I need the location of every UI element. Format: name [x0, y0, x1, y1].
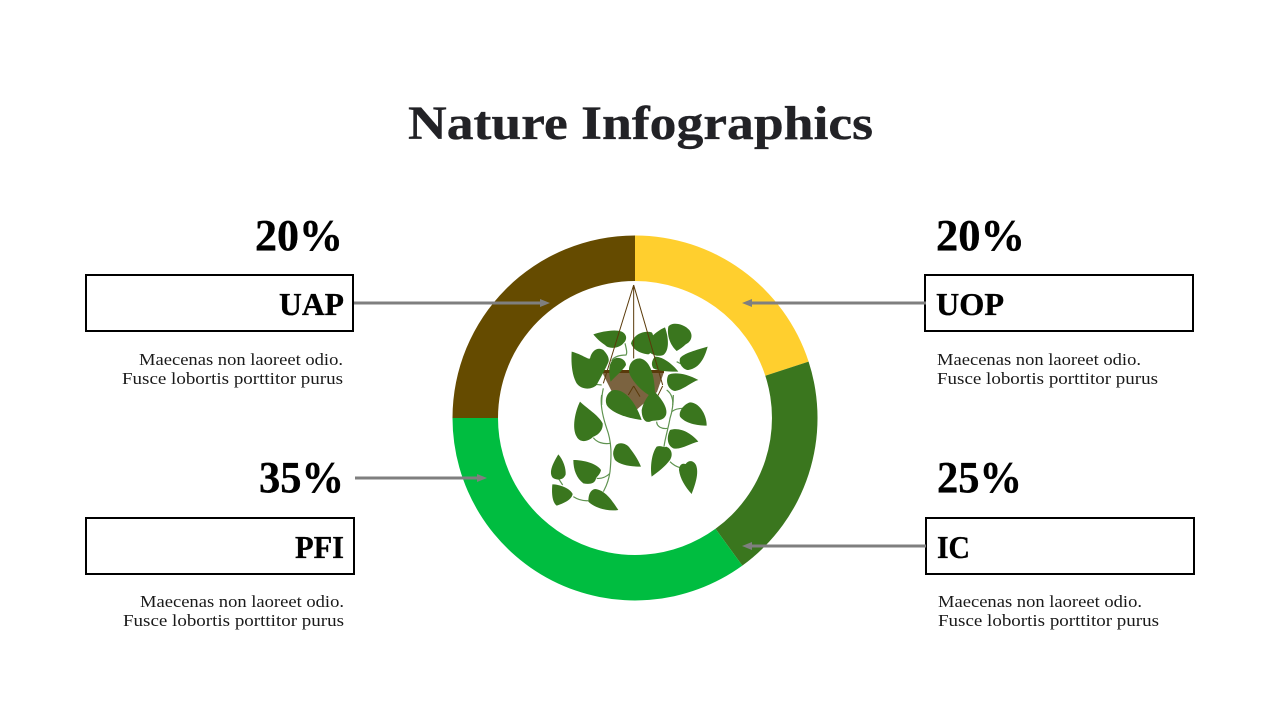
- IC description: Maecenas non laoreet odio.: [938, 592, 1142, 611]
- UOP percentage: 20%: [936, 211, 1025, 260]
- panel: UOP: [925, 211, 1193, 388]
- IC label box: [926, 518, 1194, 574]
- panel: IC: [926, 453, 1194, 630]
- UOP description: Fusce lobortis porttitor purus: [937, 369, 1158, 388]
- title: Nature Infographics: [408, 97, 873, 150]
- UAP description: Fusce lobortis porttitor purus: [122, 369, 343, 388]
- IC percentage: 25%: [937, 453, 1022, 502]
- arrow: IC to donut: [742, 542, 926, 550]
- icon: hanging plant: [551, 285, 708, 510]
- panel: PFI: [86, 453, 354, 630]
- PFI percentage: 35%: [259, 453, 344, 502]
- IC description: Fusce lobortis porttitor purus: [938, 611, 1159, 630]
- arrow: UOP to donut: [742, 299, 926, 307]
- UAP percentage: 20%: [255, 211, 343, 260]
- lower vines and leaves: [551, 390, 707, 510]
- donut chart: [452, 236, 818, 600]
- panel: UAP: [86, 211, 353, 388]
- segment: UAP 20%: [452, 236, 635, 418]
- UAP label box: [86, 275, 353, 331]
- UAP label: UAP: [279, 286, 344, 322]
- UOP label box: [925, 275, 1193, 331]
- PFI description: [123, 592, 344, 630]
- arrow: UAP to donut: [354, 299, 550, 307]
- PFI label box: [86, 518, 354, 574]
- segment: PFI 35%: [452, 418, 742, 600]
- upper vines and leaves: [571, 285, 708, 405]
- plant pot: [602, 372, 664, 412]
- IC description: [938, 592, 1159, 630]
- PFI description: Maecenas non laoreet odio.: [140, 592, 344, 611]
- segment: UOP 20%: [635, 236, 809, 376]
- arrow: PFI to donut: [355, 474, 487, 482]
- IC label: IC: [937, 529, 970, 565]
- UAP description: [122, 350, 343, 388]
- PFI label: PFI: [295, 529, 344, 565]
- UAP description: Maecenas non laoreet odio.: [139, 350, 343, 369]
- PFI description: Fusce lobortis porttitor purus: [123, 611, 344, 630]
- UOP label: UOP: [936, 286, 1004, 322]
- UOP description: Maecenas non laoreet odio.: [937, 350, 1141, 369]
- segment: IC 25%: [716, 362, 818, 566]
- UOP description: [937, 350, 1158, 388]
